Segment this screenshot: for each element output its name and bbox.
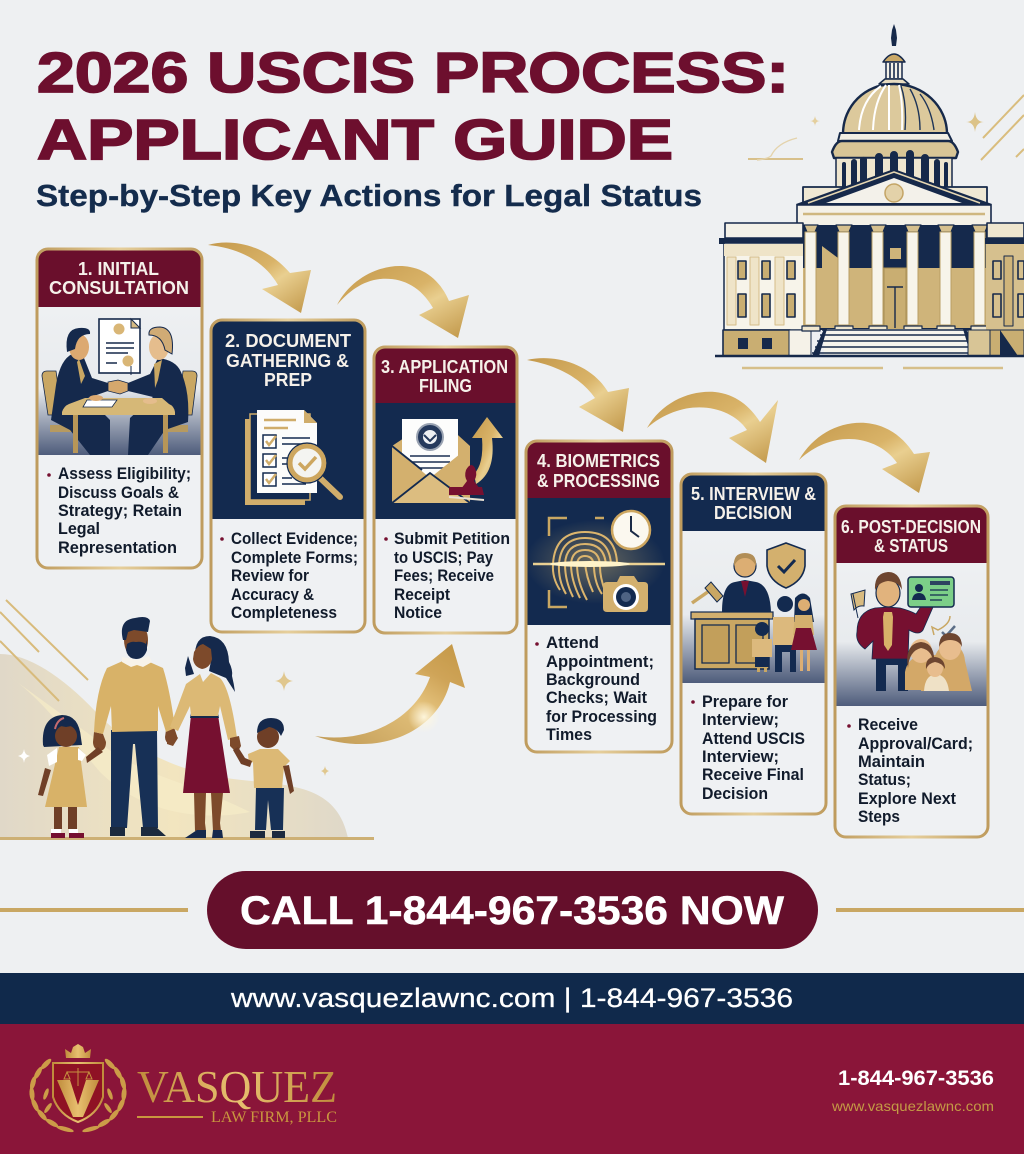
step 2 text: Accuracy &	[231, 586, 314, 604]
step 5 heading: 5. INTERVIEW &	[691, 483, 816, 504]
step 4 text: for Processing	[546, 708, 657, 726]
footer website: www.vasquezlawnc.com	[831, 1098, 994, 1114]
capitol right wing	[968, 223, 1024, 356]
step 6 text: Explore Next	[858, 790, 956, 808]
step 1 text: Strategy; Retain	[58, 502, 182, 520]
contact band: www.vasquezlawnc.com | 1-844-967-3536	[230, 983, 793, 1013]
panel: step 3 application filing	[374, 347, 517, 633]
step 4 text: Background	[546, 671, 640, 689]
call to action	[0, 871, 1024, 949]
arrow: step 3 to 4	[527, 358, 629, 432]
step 6 text: Receive	[858, 716, 918, 734]
ground line	[0, 837, 374, 840]
girl	[38, 715, 103, 838]
step 3 heading: FILING	[419, 375, 472, 396]
step 2 text	[220, 530, 358, 622]
step 6 text: Steps	[858, 808, 900, 826]
step 6 heading: 6. POST-DECISION	[841, 516, 981, 537]
step 6 heading	[841, 516, 981, 556]
step 5 heading	[691, 483, 816, 523]
step 3 text: Receipt	[394, 586, 450, 604]
title: 2026 USCIS PROCESS:	[37, 41, 789, 105]
panel: step 5 interview	[681, 474, 826, 814]
logo crown	[65, 1044, 91, 1058]
illustration: family	[0, 600, 374, 840]
step 5 text: Prepare for	[702, 693, 789, 711]
illustration: capitol building	[715, 24, 1024, 368]
footer phone: 1-844-967-3536	[838, 1067, 994, 1090]
step 4 heading: & PROCESSING	[537, 470, 660, 491]
step 4 heading	[537, 450, 660, 491]
step 2 heading: 2. DOCUMENT	[225, 330, 352, 351]
step 2 text: Completeness	[231, 604, 337, 622]
step 4 heading: 4. BIOMETRICS	[537, 450, 660, 471]
panel: step 4 biometrics	[525, 441, 672, 752]
icon: envelope and stamp	[392, 417, 503, 503]
step 2 heading: PREP	[264, 369, 312, 390]
background hill and rays	[0, 600, 348, 838]
step 6 text: Maintain	[858, 753, 925, 771]
capitol steps	[812, 329, 978, 356]
logo shield	[53, 1063, 103, 1122]
step 1 heading	[49, 258, 189, 298]
step 1 text: Assess Eligibility;	[58, 465, 191, 483]
footer	[0, 1024, 1024, 1154]
icon: fingerprint, clock and camera	[525, 511, 665, 612]
icon: approved applicant with card and family	[851, 572, 972, 691]
step 5 heading: DECISION	[714, 502, 792, 523]
step 6 heading: & STATUS	[874, 535, 948, 556]
step 2 text: Review for	[231, 567, 310, 585]
icon: checklist and magnifier	[245, 410, 340, 505]
step 4 text	[535, 634, 657, 744]
step 1 heading: CONSULTATION	[49, 277, 189, 298]
step 2 heading	[225, 330, 352, 390]
icon: judge, shield and family	[691, 543, 817, 672]
logo: Vasquez Law Firm: VASQUEZ	[137, 1062, 337, 1112]
title: APPLICANT GUIDE	[37, 108, 673, 172]
step 1 heading: 1. INITIAL	[78, 258, 159, 279]
step 3 text: Fees; Receive	[394, 567, 494, 585]
call to action: CALL 1-844-967-3536 NOW	[240, 889, 784, 933]
subtitle: Step-by-Step Key Actions for Legal Status	[36, 178, 702, 213]
arrow: step 1 to 2	[208, 242, 311, 313]
step 6 text: Status;	[858, 771, 911, 789]
step 5 text	[691, 693, 805, 803]
panel: step 2 document gathering	[211, 320, 365, 632]
logo wreath	[29, 1057, 127, 1133]
decorative gold rules	[0, 908, 1024, 912]
capitol left wing	[719, 223, 811, 356]
step 3 text	[384, 530, 510, 622]
father	[93, 617, 177, 836]
step 4 text: Attend	[546, 634, 599, 652]
step 4 text: Checks; Wait	[546, 689, 647, 707]
step 6 text: Approval/Card;	[858, 735, 973, 753]
step 5 text: Attend USCIS	[702, 730, 805, 748]
step 4 text: Times	[546, 726, 592, 744]
step 1 text: Discuss Goals &	[58, 484, 179, 502]
mother	[167, 636, 241, 838]
capitol portico	[802, 225, 989, 331]
step 5 text: Interview;	[702, 748, 779, 766]
step 1 text	[47, 465, 191, 557]
step 6 text	[847, 716, 973, 826]
arrow: step 2 to 3	[337, 266, 469, 338]
step 3 text: Notice	[394, 604, 442, 622]
title	[37, 41, 789, 172]
logo: Vasquez Law Firm: LAW FIRM, PLLC	[211, 1109, 337, 1126]
icon: handshake consultation	[42, 319, 197, 455]
step 3 text: Submit Petition	[394, 530, 510, 548]
arrow: family to step 3	[315, 644, 465, 744]
decoration: rays and sparkles near capitol	[810, 95, 1024, 160]
arrow: step 4 to 5	[647, 392, 778, 463]
logo: Vasquez Law Firm	[29, 1044, 337, 1133]
step 5 text: Decision	[702, 785, 768, 803]
contact band	[0, 973, 1024, 1024]
step 2 heading: GATHERING &	[226, 350, 349, 371]
step 1 text: Representation	[58, 539, 177, 557]
step 3 heading: 3. APPLICATION	[381, 356, 508, 377]
panel: step 1 initial consultation	[37, 249, 202, 568]
step 1 text: Legal	[58, 520, 100, 538]
step 2 text: Complete Forms;	[231, 549, 358, 567]
panel: step 6 post-decision	[835, 506, 988, 837]
step 5 text: Interview;	[702, 711, 779, 729]
step 4 text: Appointment;	[546, 653, 654, 671]
boy	[233, 718, 294, 838]
step 3 heading	[381, 356, 508, 396]
step 3 text: to USCIS; Pay	[394, 549, 494, 567]
step 2 text: Collect Evidence;	[231, 530, 358, 548]
step 5 text: Receive Final	[702, 766, 804, 784]
arrow: step 5 to 6	[799, 423, 930, 493]
